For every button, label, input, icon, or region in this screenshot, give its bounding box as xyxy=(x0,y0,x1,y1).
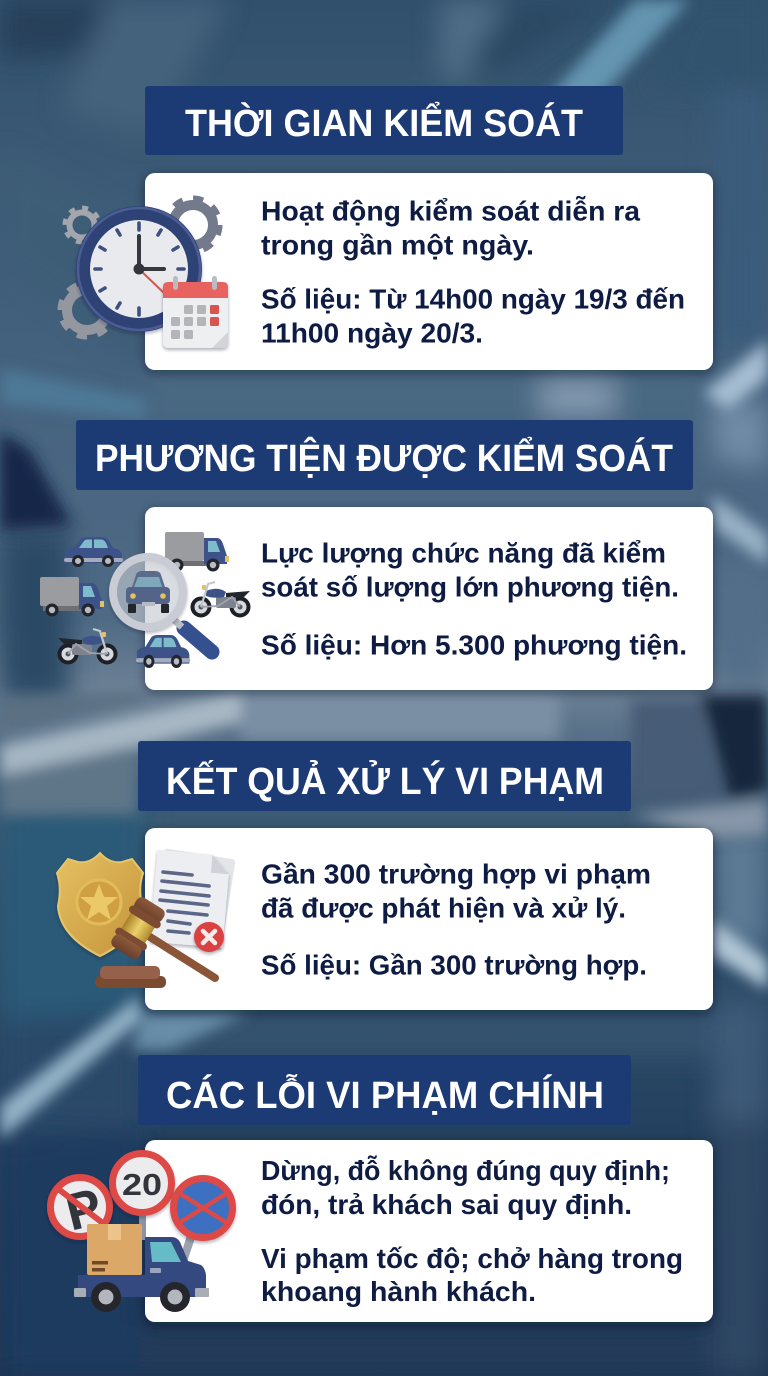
text: kết quả: đã được phát hiện và xử lý. xyxy=(261,892,626,924)
text: thời gian xyxy=(261,196,685,348)
icon: speed limit sign: 20 xyxy=(122,1167,162,1202)
text: kết quả: Số liệu: Gần 300 trường hợp. xyxy=(261,950,647,980)
panel: kết quả xử lý vi phạm xyxy=(145,828,713,1010)
heading: kết quả xử lý vi phạm xyxy=(138,741,631,811)
icon: no parking sign: P xyxy=(60,1178,108,1242)
icon: truck xyxy=(74,1237,209,1312)
text: phương tiện: soát số lượng lớn phương tiện. xyxy=(261,572,679,602)
heading: các lỗi vi phạm chính: CÁC LỖI VI PHẠM CHÍNH xyxy=(166,1072,604,1117)
icon: clock, gears and calendar xyxy=(61,199,228,348)
heading: phương tiện được kiểm soát xyxy=(76,420,693,490)
text: các lỗi: đón, trả khách sai quy định. xyxy=(261,1189,632,1220)
text: thời gian: Hoạt động kiểm soát diễn ra xyxy=(261,196,640,226)
text: các lỗi: Vi phạm tốc độ; chở hàng trong xyxy=(261,1243,683,1274)
text: kết quả xyxy=(261,858,651,980)
heading: thời gian kiểm soát xyxy=(145,86,623,155)
icon: speed limit sign xyxy=(112,1154,172,1212)
icon: vehicles and magnifier xyxy=(40,532,250,668)
text: phương tiện: Lực lượng chức năng đã kiểm xyxy=(261,538,666,568)
heading: thời gian kiểm soát: THỜI GIAN KIỂM SOÁT xyxy=(185,100,583,145)
heading: phương tiện được kiểm soát: PHƯƠNG TIỆN ĐƯỢC KIỂM SOÁT xyxy=(95,435,673,480)
icon: badge, document and gavel xyxy=(57,848,236,988)
heading: kết quả xử lý vi phạm: KẾT QUẢ XỬ LÝ VI PHẠM xyxy=(166,759,604,803)
heading: các lỗi vi phạm chính xyxy=(138,1055,631,1125)
text: các lỗi: Dừng, đỗ không đúng quy định; xyxy=(261,1155,670,1186)
panel: phương tiện được kiểm soát xyxy=(145,507,713,690)
text: các lỗi: khoang hành khách. xyxy=(261,1276,536,1307)
text: kết quả: Gần 300 trường hợp vi phạm xyxy=(261,858,651,890)
text: các lỗi xyxy=(261,1155,683,1307)
icon: cargo box xyxy=(87,1224,142,1275)
text: thời gian: trong gần một ngày. xyxy=(261,230,534,260)
panel: thời gian kiểm soát xyxy=(145,173,713,370)
panel: các lỗi vi phạm chính xyxy=(145,1140,713,1322)
text: phương tiện xyxy=(261,538,687,660)
icon: traffic signs and delivery truck xyxy=(50,1154,232,1312)
text: thời gian: 11h00 ngày 20/3. xyxy=(261,318,483,348)
icon: no stopping sign xyxy=(174,1178,232,1238)
text: phương tiện: Số liệu: Hơn 5.300 phương tiện. xyxy=(261,630,687,660)
text: thời gian: Số liệu: Từ 14h00 ngày 19/3 đến xyxy=(261,284,685,314)
